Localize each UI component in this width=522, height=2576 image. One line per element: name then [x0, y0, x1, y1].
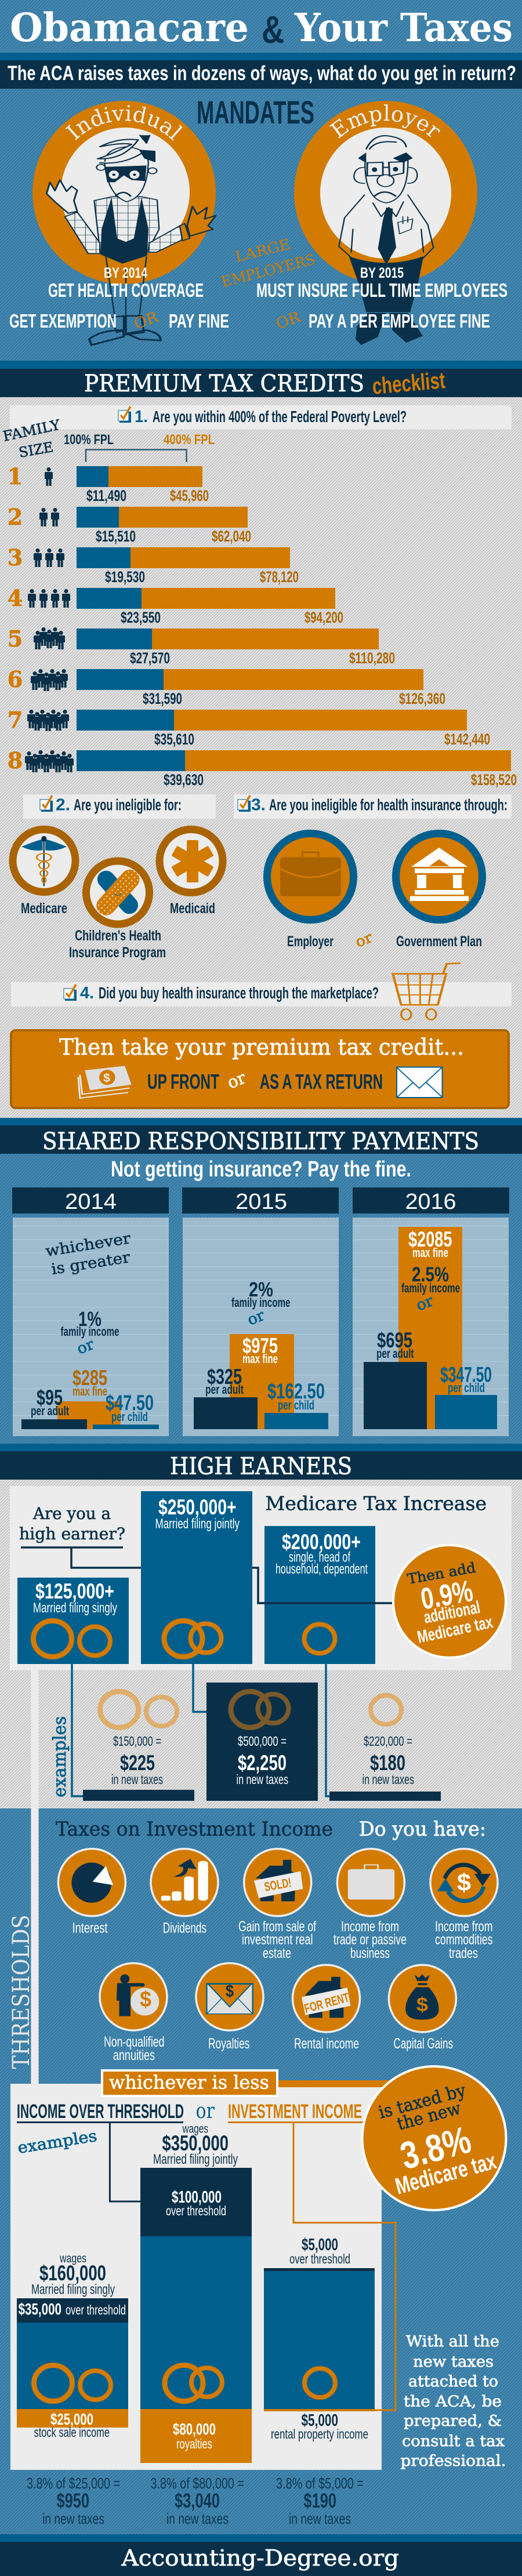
example: single: in new taxes — [362, 1772, 414, 1787]
example: married filing jointly — [206, 1683, 318, 1801]
heading: taxes on investment income: Taxes on Investment Income — [56, 1818, 333, 1841]
panel: medicare tax increase — [10, 1486, 512, 1670]
bar chart: 2015: $325 — [207, 1365, 242, 1389]
result: stock sale tax: $950 — [57, 2490, 89, 2512]
icon: medicaid star of life — [160, 829, 223, 917]
icon: sold house: investment real — [242, 1932, 313, 1948]
text: closing advice: new taxes — [413, 2353, 494, 2371]
chart: family size FPL bars: $78,120 — [260, 568, 299, 586]
bar: married filing singly example: over threshold — [66, 2302, 126, 2317]
bar: single rental example: over threshold — [289, 2251, 350, 2266]
panel: checklist question 3 — [234, 794, 512, 819]
background: gray high earners section — [0, 1480, 522, 1808]
heading: income over threshold or investment income: or — [196, 2099, 215, 2123]
icon: commodities cycle — [430, 1849, 498, 1961]
chart: family size FPL bars: 7 — [8, 707, 23, 733]
panel: checklist question 1: 1. — [135, 408, 148, 426]
question: are you a high earner — [19, 1504, 125, 1543]
employer mandate text: BY 2015 — [360, 265, 404, 281]
chart: family size FPL bars: $35,610 — [154, 731, 194, 748]
text: closing advice: consult a tax — [402, 2433, 505, 2450]
result: stock sale tax: in new taxes — [42, 2510, 104, 2527]
individual mandate text: GET EXEMPTION — [9, 310, 117, 332]
block: single head of household — [258, 1526, 375, 1664]
footer: Accounting-Degree.org — [121, 2545, 399, 2571]
callout: take your premium tax credit — [11, 1030, 509, 1108]
icon: medicare caduceus — [13, 829, 75, 917]
labels: employer or government plan: Employer — [287, 933, 334, 950]
icon: commodities cycle: commodities — [435, 1932, 493, 1948]
bar chart: 2016: $2085 — [408, 1227, 452, 1251]
chart: family size FPL bars: 4 — [8, 585, 23, 611]
arrow: connector to thresholds — [21, 1547, 392, 1603]
bar: married filing jointly example: $350,000 — [162, 2131, 229, 2155]
callout: then add 0.9%: 0.9% — [418, 1574, 476, 1616]
employer mandate text — [256, 265, 507, 333]
callout: then add 0.9%: Medicare tax — [416, 1612, 495, 1647]
chart: family size FPL bars: $31,590 — [143, 690, 182, 707]
bar chart: 2014: $285 — [72, 1366, 107, 1390]
bar chart: 2016: family income — [401, 1281, 460, 1295]
bar chart: 2015: $162.50 — [267, 1379, 325, 1403]
text: closing advice: professional. — [400, 2453, 506, 2470]
icon: royalties envelope: Royalties — [208, 2036, 249, 2052]
panel: checklist question 4: 4. — [80, 984, 94, 1002]
bar: married filing jointly example — [140, 2122, 252, 2463]
icon: money stack — [78, 1066, 132, 1098]
icon: commodities cycle: $ — [457, 1869, 471, 1896]
heading: high earners — [0, 1444, 522, 1480]
chart: family size FPL bars: $62,040 — [212, 528, 251, 545]
chart: family size FPL bars: $15,510 — [96, 528, 136, 545]
panel: header — [0, 5, 522, 89]
bar chart: 2016: or — [414, 1292, 436, 1314]
employer badge — [294, 101, 477, 279]
bar: married filing jointly example: Married filing jointly — [153, 2152, 238, 2167]
bar: single rental example: $5,000 — [302, 2236, 338, 2254]
icon: royalties envelope — [196, 1963, 263, 2052]
panel: 2014: 2014 — [65, 1190, 117, 1214]
example: married filing singly: $225 — [120, 1751, 155, 1775]
large employers label: EMPLOYERS — [219, 251, 317, 290]
icon: trade briefcase: trade or passive — [334, 1932, 407, 1948]
question: are you a high earner: high earner? — [19, 1524, 125, 1543]
label: children's health insurance program: Children's Health — [75, 928, 161, 944]
panel: 2015 — [182, 1187, 339, 1436]
block: married filing jointly: $250,000+ — [158, 1495, 237, 1519]
panel: mandates — [9, 94, 507, 346]
heading: high earners: HIGH EARNERS — [170, 1453, 352, 1480]
divider column: thresholds — [31, 1670, 39, 2084]
bar chart: 2016: max fine — [412, 1245, 448, 1260]
chart: family size FPL bars: $11,490 — [86, 487, 126, 504]
example: married filing jointly: $2,250 — [238, 1751, 287, 1775]
callout: take your premium tax credit: or — [224, 1067, 248, 1092]
example: single: $220,000 = — [364, 1734, 412, 1749]
bar: single rental example — [264, 2236, 375, 2441]
chart: family size FPL bars: $126,360 — [399, 690, 445, 707]
bar chart: 2014: $95 — [37, 1386, 63, 1409]
label: examples vertical: examples — [50, 1716, 70, 1797]
example: single: $180 — [370, 1751, 405, 1775]
bar chart: 2014: $47.50 — [106, 1391, 154, 1415]
text: closing advice: prepared, & — [404, 2412, 502, 2430]
icon: rental house — [292, 1965, 360, 2052]
bar: married filing singly example: $35,000 — [19, 2300, 61, 2318]
text: 2% family income — [231, 1278, 290, 1329]
bar: married filing singly example: Married filing singly — [31, 2282, 115, 2297]
subheading: pay the fine: Not getting insurance? Pay the fine. — [111, 1157, 411, 1182]
title: & — [262, 8, 284, 51]
chart: family size FPL bars: 2 — [8, 504, 23, 530]
block: married filing singly: $125,000+ — [35, 1579, 114, 1603]
chart: family size FPL bars: $142,440 — [444, 731, 490, 748]
bar chart: 2016 — [364, 1227, 497, 1429]
result: rental tax — [276, 2475, 364, 2527]
icon: capital gains bag: Capital Gains — [393, 2036, 453, 2052]
example: married filing singly: in new taxes — [111, 1772, 163, 1787]
arrows: threshold to examples — [72, 1664, 329, 1796]
title — [10, 5, 513, 51]
result: royalties tax: $3,040 — [175, 2490, 220, 2512]
panel: 2014 — [12, 1187, 169, 1436]
result: rental tax: $190 — [304, 2490, 336, 2512]
label: medicare: Medicare — [21, 900, 67, 917]
bar chart: 2015: max fine — [242, 1351, 278, 1366]
text: 1% family income: family income — [60, 1324, 119, 1339]
panel: checklist question 4: Did you buy health insurance through the marketplace? — [99, 984, 379, 1002]
text: 1% family income: or — [74, 1336, 97, 1358]
bar chart: 2015: $975 — [242, 1334, 278, 1358]
block: married filing jointly — [141, 1491, 252, 1664]
callout: whichever is greater: whichever — [44, 1230, 132, 1260]
label: medicaid: Medicaid — [170, 900, 215, 917]
icon: employer briefcase — [267, 834, 354, 920]
text: 2% family income: family income — [231, 1295, 290, 1310]
bar chart: 2014: per adult — [31, 1404, 69, 1418]
chart: family size FPL bars: $23,550 — [121, 609, 161, 626]
label: family size: SIZE — [17, 439, 55, 461]
text: 1% family income — [60, 1308, 119, 1358]
icon: capital gains bag — [389, 1965, 456, 2052]
heading: mandates: MANDATES — [197, 94, 314, 130]
individual mandate text — [9, 265, 229, 333]
bar chart: 2016: $347.50 — [440, 1363, 492, 1387]
footer — [0, 2534, 522, 2576]
chart: family size FPL bars: $45,960 — [170, 487, 209, 504]
label: whichever is less: whichever is less — [109, 2071, 269, 2093]
icon: dividends chart — [151, 1849, 218, 1936]
panel: checklist question 2 — [23, 794, 216, 819]
icon: shopping cart — [393, 963, 461, 1020]
heading: medicare tax increase: Medicare Tax Increase — [266, 1492, 487, 1514]
chart: family size FPL bars: 5 — [8, 626, 23, 652]
bar: married filing jointly example: $80,000 — [173, 2420, 216, 2438]
label: children's health insurance program — [69, 928, 166, 961]
bar chart: 2014: max fine — [72, 1384, 107, 1398]
bar: married filing jointly example: royalties — [176, 2436, 212, 2451]
individual mandate text: GET HEALTH COVERAGE — [48, 279, 204, 301]
icon: rental house: FOR RENT — [303, 1990, 351, 2016]
bar: married filing singly example: stock sale income — [34, 2425, 110, 2440]
legend: FPL bracket: 400% FPL — [164, 432, 215, 448]
callout: whichever is greater: is greater — [50, 1249, 132, 1278]
callout: taxed by 3.8% medicare tax: the new — [395, 2098, 463, 2135]
illustration: employer cartoon — [339, 136, 433, 345]
bar: married filing jointly example: over threshold — [166, 2203, 226, 2218]
label: thresholds vertical: THRESHOLDS — [8, 1914, 35, 2069]
chart: family size FPL bars — [8, 463, 517, 789]
callout: taxed by 3.8% medicare tax: is taxed by — [376, 2080, 468, 2123]
label: examples: examples — [16, 2127, 98, 2157]
block: single head of household: $200,000+ — [282, 1530, 361, 1554]
panel: checklist question 4 — [11, 982, 512, 1007]
heading: taxes on investment income: Do you have: — [359, 1818, 486, 1841]
heading: taxes on investment income — [56, 1818, 486, 1841]
result: royalties tax: 3.8% of $80,000 = — [151, 2475, 244, 2492]
chart: family size FPL bars: $19,530 — [105, 568, 145, 586]
icon: interest pie — [58, 1849, 125, 1936]
individual badge: Individual — [65, 105, 182, 140]
icon: children's health bandage — [69, 861, 166, 961]
callout: taxed by 3.8% medicare tax — [362, 2066, 506, 2210]
background: blue investment section — [0, 1808, 522, 2542]
result: stock sale tax: 3.8% of $25,000 = — [27, 2475, 120, 2492]
result: rental tax: 3.8% of $5,000 = — [276, 2475, 364, 2492]
icon: envelope — [397, 1067, 443, 1098]
panel: checklist question 3: 3. — [251, 795, 266, 814]
bar: married filing singly example — [17, 2252, 128, 2440]
illustration: individual cartoon — [46, 135, 216, 345]
icon: trade briefcase: business — [350, 1945, 390, 1961]
example: single — [329, 1695, 441, 1801]
example: married filing jointly: $500,000 = — [238, 1734, 287, 1749]
text: 2% family income: 2% — [249, 1278, 273, 1301]
panel: checklist question 2: Are you ineligible for: — [74, 795, 182, 814]
example: married filing jointly: in new taxes — [237, 1772, 288, 1787]
bar chart: 2015: per child — [278, 1398, 314, 1412]
chart: family size FPL bars: $39,630 — [164, 771, 204, 789]
arrow: threshold connector — [17, 2122, 183, 2201]
background: blue top section — [0, 0, 522, 400]
heading: income over threshold or investment income: INCOME OVER THRESHOLD — [17, 2101, 184, 2123]
text: closing advice: With all the — [406, 2333, 499, 2350]
individual mandate text: OR — [132, 308, 161, 333]
text: 1% family income: 1% — [78, 1308, 102, 1331]
bar: married filing singly example: $25,000 — [50, 2410, 93, 2428]
icon: sold house: Gain from sale of — [238, 1919, 316, 1935]
bar: single rental example: $5,000 — [302, 2411, 338, 2430]
callout: take your premium tax credit: AS A TAX RETURN — [260, 1070, 383, 1093]
chart: family size FPL bars: $27,570 — [130, 649, 170, 667]
icon: rental house: Rental income — [294, 2036, 359, 2052]
labels: employer or government plan — [287, 929, 482, 951]
callout: then add 0.9% — [393, 1545, 506, 1658]
label: children's health insurance program: Insurance Program — [69, 944, 166, 961]
bar chart: 2016: per adult — [376, 1346, 414, 1361]
chart: family size FPL bars: 1 — [8, 463, 23, 489]
bar chart: 2016: 2.5% — [412, 1263, 449, 1286]
text: closing advice: the ACA, be — [404, 2393, 502, 2411]
text: closing advice — [400, 2333, 506, 2470]
icon: government building — [396, 834, 483, 920]
background: blue shared responsibility section — [0, 1154, 522, 1449]
large employers label: LARGE — [233, 235, 292, 266]
heading: premium tax credits: checklist — [371, 368, 446, 399]
panel: income over threshold examples — [10, 2069, 396, 2470]
heading: premium tax credits — [0, 361, 522, 399]
panel: 2016 — [353, 1187, 509, 1436]
text: closing advice: attached to — [408, 2373, 498, 2390]
block: single head of household: household, dependent — [276, 1561, 368, 1577]
label: family size — [1, 416, 62, 461]
chart: family size FPL bars: 8 — [8, 747, 23, 773]
block: married filing singly — [17, 1578, 129, 1664]
block: married filing jointly: Married filing jointly — [155, 1516, 240, 1532]
block: married filing singly: Married filing singly — [33, 1600, 117, 1616]
result: rental tax: in new taxes — [289, 2510, 351, 2527]
employer mandate text: OR — [274, 308, 303, 333]
bar chart: 2016: per child — [448, 1380, 485, 1395]
icon: sold house: SOLD! — [263, 1875, 292, 1894]
icon: dividends chart: Dividends — [163, 1920, 206, 1936]
icon: sold house — [238, 1849, 316, 1961]
arrow: investment income connector — [228, 2122, 396, 2410]
legend: FPL bracket — [64, 432, 215, 462]
icon: non-qualified annuities — [100, 1963, 167, 2063]
heading: shared responsibility payments: SHARED RESPONSIBILITY PAYMENTS — [42, 1128, 479, 1155]
icon: non-qualified annuities: $ — [140, 1988, 151, 2012]
callout: take your premium tax credit: UP FRONT — [147, 1070, 219, 1093]
icon: trade briefcase — [334, 1849, 407, 1961]
title: Obamacare — [10, 5, 249, 50]
result: royalties tax: in new taxes — [166, 2510, 229, 2527]
heading: shared responsibility payments — [0, 1118, 522, 1155]
title: Your Taxes — [294, 5, 513, 50]
icon: trade briefcase: Income from — [341, 1919, 399, 1935]
callout: take your premium tax credit: $ — [103, 1072, 110, 1085]
heading: premium tax credits: PREMIUM TAX CREDITS — [84, 370, 364, 397]
example: married filing singly — [83, 1692, 194, 1801]
bar chart: 2014 — [21, 1366, 159, 1429]
bar chart: 2015: per adult — [205, 1382, 244, 1397]
bar chart: 2014: per child — [111, 1409, 148, 1424]
panel: checklist question 2: 2. — [56, 795, 70, 814]
icon: commodities cycle: trades — [449, 1945, 478, 1961]
bar: single rental example: rental property income — [271, 2426, 368, 2441]
icon: non-qualified annuities: Non-qualified — [104, 2034, 165, 2050]
result: royalties tax — [151, 2475, 244, 2527]
bar chart: 2015 — [194, 1334, 328, 1429]
result: stock sale tax — [27, 2475, 120, 2527]
callout: then add 0.9%: Then add — [406, 1560, 477, 1587]
chart: family size FPL bars: $94,200 — [304, 609, 343, 626]
icon: royalties envelope: $ — [226, 1982, 234, 2001]
legend: FPL bracket: 100% FPL — [64, 432, 114, 448]
text: 2% family income: or — [245, 1307, 267, 1329]
icon: interest pie: Interest — [72, 1920, 108, 1936]
heading: income over threshold or investment income: INVESTMENT INCOME — [228, 2101, 362, 2123]
labels: employer or government plan: or — [353, 929, 375, 951]
chart: family size FPL bars: 6 — [8, 666, 23, 692]
question: are you a high earner: Are you a — [32, 1504, 111, 1523]
block: single head of household: single, head of — [289, 1549, 350, 1565]
employer badge: Employer — [329, 104, 441, 139]
callout: whichever is greater — [44, 1230, 132, 1278]
bar: married filing singly example: $160,000 — [39, 2261, 106, 2285]
callout: taxed by 3.8% medicare tax: 3.8% — [396, 2117, 475, 2178]
chart: family size FPL bars: 3 — [8, 544, 23, 571]
chart: family size FPL bars: $110,280 — [349, 649, 395, 667]
callout: then add 0.9%: additional — [422, 1598, 482, 1627]
icon: non-qualified annuities: annuities — [113, 2047, 155, 2063]
panel: 2015: 2015 — [235, 1190, 287, 1214]
individual mandate text: PAY FINE — [169, 310, 229, 332]
bar chart: 2016: $695 — [377, 1328, 412, 1352]
callout: take your premium tax credit: Then take your premium tax credit... — [59, 1034, 464, 1060]
individual badge — [32, 101, 216, 284]
bar: married filing jointly example: wages — [182, 2122, 208, 2135]
icon: sold house: estate — [263, 1945, 291, 1961]
bar: married filing jointly example: $100,000 — [172, 2188, 222, 2207]
bar: married filing singly example: wages — [59, 2252, 86, 2265]
panel: checklist question 1 — [10, 405, 512, 429]
background: gray premium credit section — [0, 394, 522, 1119]
example: married filing singly: $150,000 = — [113, 1734, 161, 1749]
icon: capital gains bag: $ — [416, 1994, 428, 2016]
labels: employer or government plan: Government Plan — [396, 933, 482, 950]
icon: commodities cycle: Income from — [435, 1919, 493, 1935]
panel: 2016: 2016 — [405, 1190, 456, 1214]
individual mandate text: BY 2014 — [104, 265, 147, 281]
label: family size: FAMILY — [1, 416, 62, 445]
